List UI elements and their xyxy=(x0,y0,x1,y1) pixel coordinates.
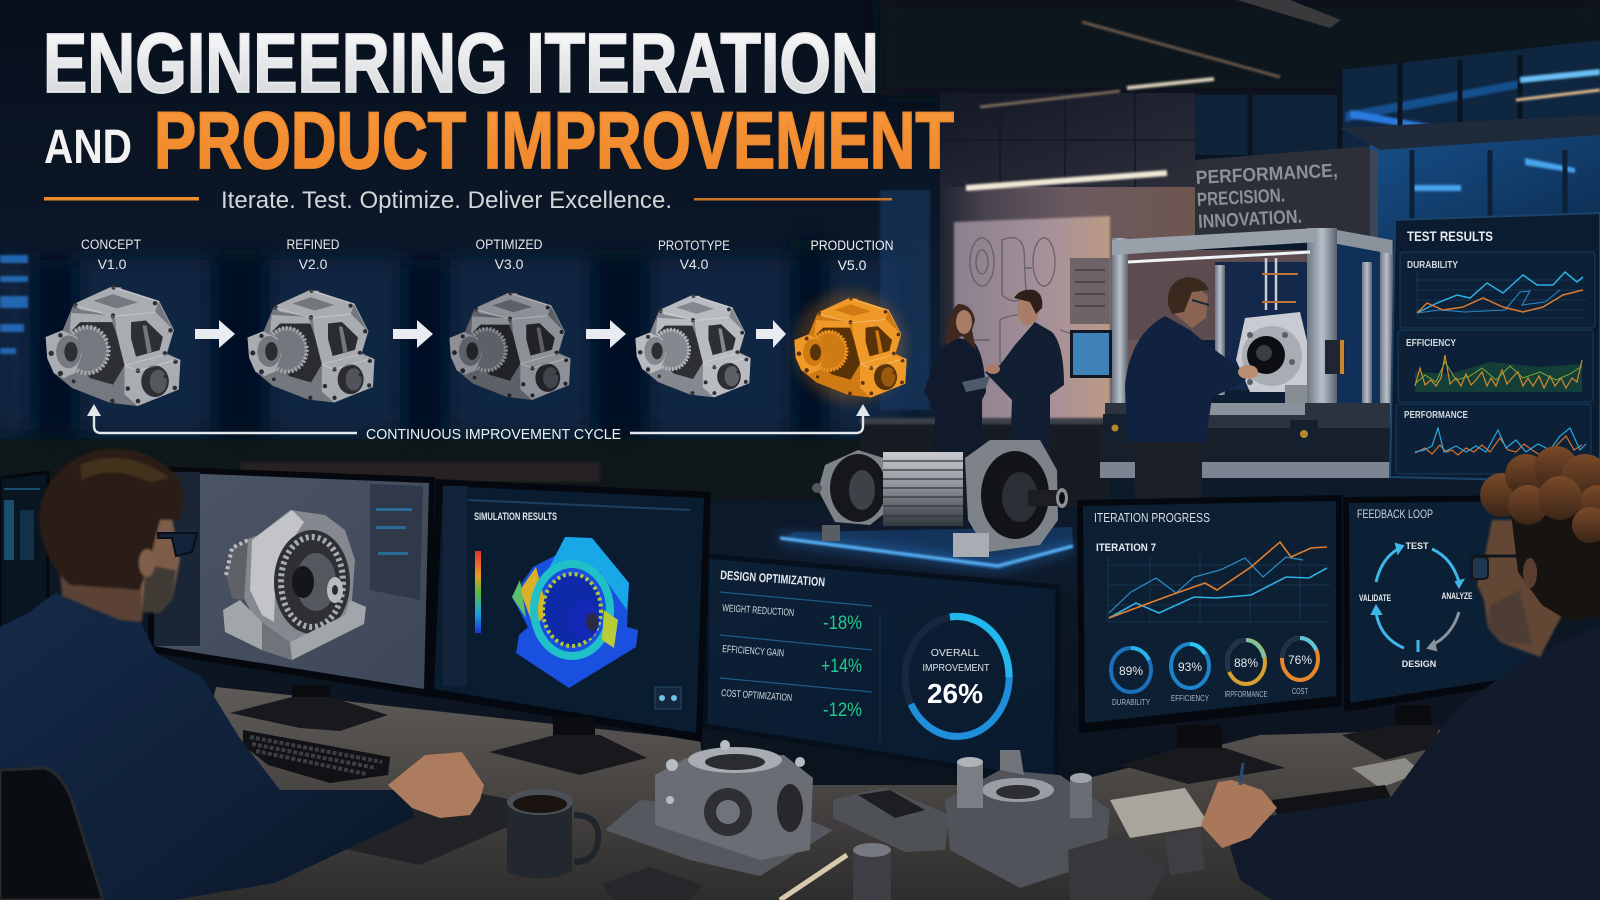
mouse pad xyxy=(326,783,551,865)
line chart: ITERATION 7 xyxy=(1096,542,1156,554)
rig frame xyxy=(1112,228,1393,448)
cycle diagram: DESIGN xyxy=(1402,659,1436,669)
head back xyxy=(1510,505,1600,622)
continuous improvement cycle xyxy=(87,404,870,443)
metric: efficiency gain xyxy=(722,644,862,677)
metric: weight reduction: WEIGHT REDUCTION xyxy=(722,603,794,619)
stage: optimized v3.0: V3.0 xyxy=(495,256,524,272)
test results panel xyxy=(1390,213,1600,482)
title word: and: AND xyxy=(44,121,132,174)
metric: weight reduction xyxy=(722,603,862,634)
face xyxy=(1477,520,1570,657)
metric: efficiency gain: EFFICIENCY GAIN xyxy=(722,644,784,659)
line chart xyxy=(1096,542,1330,622)
gauge: durability 89% xyxy=(1111,648,1151,707)
engineer at left xyxy=(0,449,484,900)
stage: production v5.0: PRODUCTION xyxy=(810,238,894,253)
stage: optimized v3.0: OPTIMIZED xyxy=(476,237,543,252)
wall sign xyxy=(1195,146,1370,240)
gauge: cost 76% xyxy=(1282,638,1318,696)
coffee mug xyxy=(507,789,598,878)
machined part 2 xyxy=(833,750,1205,900)
monitor stand xyxy=(489,717,647,775)
cycle diagram xyxy=(1359,541,1472,669)
glasses xyxy=(1470,556,1520,579)
gauge: performance 88%: IRPFORMANCE xyxy=(1224,689,1268,699)
overall improvement donut: IMPROVEMENT xyxy=(922,662,990,674)
upper wall xyxy=(940,93,1195,189)
panel heading: DESIGN OPTIMIZATION xyxy=(720,568,826,589)
engineer at test rig xyxy=(1125,277,1258,500)
durability chart xyxy=(1400,252,1595,328)
pen xyxy=(1240,763,1243,785)
performance chart xyxy=(1396,404,1591,474)
glasses xyxy=(158,533,197,556)
woman engineer xyxy=(924,304,990,452)
hand xyxy=(388,752,484,818)
overall improvement donut xyxy=(905,616,1009,737)
stage: production v5.0: V5.0 xyxy=(838,257,867,273)
title xyxy=(43,16,954,186)
panel heading: FEEDBACK LOOP xyxy=(1357,507,1433,521)
simulation housing heatmap xyxy=(512,537,638,688)
cycle diagram: ANALYZE xyxy=(1442,591,1472,601)
engineer at right xyxy=(1201,446,1600,900)
stage: refined v2.0 xyxy=(248,237,374,402)
back windows xyxy=(1195,40,1600,240)
monitor: left edge xyxy=(0,472,48,630)
shirt xyxy=(0,593,415,900)
test rig xyxy=(1100,228,1393,478)
version stages xyxy=(46,237,907,406)
stage: optimized v3.0 xyxy=(449,237,571,400)
keyboard right xyxy=(1272,785,1392,825)
gauge: efficiency 93%: 93% xyxy=(1178,660,1202,674)
monitor stand xyxy=(230,685,388,731)
small bracket xyxy=(602,867,703,900)
ear xyxy=(1523,558,1537,588)
tagline text: Iterate. Test. Optimize. Deliver Excellence. xyxy=(221,187,672,214)
stress colour scale xyxy=(475,551,481,633)
arrow 4 xyxy=(756,320,786,348)
stage: prototype v4.0: PROTOTYPE xyxy=(658,238,730,253)
glass platform xyxy=(700,520,1078,590)
shirt xyxy=(1230,625,1600,900)
keyboard left xyxy=(243,730,390,783)
curly hair xyxy=(1480,446,1600,543)
efficiency chart: EFFICIENCY xyxy=(1406,337,1456,349)
hand xyxy=(1201,780,1277,848)
gauge: durability 89%: DURABILITY xyxy=(1112,697,1150,707)
overall improvement donut: 26% xyxy=(927,678,983,709)
stage: refined v2.0: V2.0 xyxy=(299,256,328,272)
metric: efficiency gain: +14% xyxy=(821,656,862,677)
stage: concept v1.0: V1.0 xyxy=(98,256,127,272)
CAD base block xyxy=(223,600,366,660)
metric: cost optimization xyxy=(721,688,862,721)
stage: production v5.0 xyxy=(794,238,907,403)
cylinder part xyxy=(853,843,891,900)
CAD housing model xyxy=(223,510,366,660)
sim buttons xyxy=(655,687,681,709)
rig motor xyxy=(1236,312,1310,409)
two engineers talking xyxy=(924,290,1064,452)
desk xyxy=(170,687,1600,900)
stage: concept v1.0: CONCEPT xyxy=(81,237,141,252)
metric: cost optimization: -12% xyxy=(823,700,862,721)
monitor: simulation results xyxy=(428,479,711,775)
gauge: cost 76%: 76% xyxy=(1288,653,1312,667)
man engineer xyxy=(985,290,1064,452)
monitor: feedback loop xyxy=(1342,495,1540,760)
back benches xyxy=(0,418,1110,508)
panel heading: ITERATION PROGRESS xyxy=(1094,510,1210,525)
machined part 1 xyxy=(605,740,833,876)
head xyxy=(39,449,184,622)
monitor stand xyxy=(1120,725,1285,784)
cycle label: CONTINUOUS IMPROVEMENT CYCLE xyxy=(366,426,621,443)
stage: prototype v4.0: V4.0 xyxy=(680,256,709,272)
monitor: iteration progress xyxy=(1077,495,1342,784)
monitor stand xyxy=(1342,705,1440,760)
motor on display platform xyxy=(700,440,1078,590)
overall improvement donut: OVERALL xyxy=(931,647,979,659)
panel heading: TEST RESULTS xyxy=(1407,228,1493,244)
metric: weight reduction: -18% xyxy=(823,613,862,634)
stage: prototype v4.0 xyxy=(635,238,751,397)
tagline xyxy=(44,187,892,214)
chair xyxy=(0,768,103,900)
desk objects xyxy=(243,730,1422,900)
gauge: efficiency 93%: EFFICIENCY xyxy=(1171,693,1209,703)
ceiling lights xyxy=(966,22,1600,188)
stylus bar xyxy=(780,855,847,900)
durability chart: DURABILITY xyxy=(1407,259,1458,271)
simulation heading: SIMULATION RESULTS xyxy=(474,511,557,523)
cycle diagram: VALIDATE xyxy=(1359,593,1391,603)
wall sign: PRECISION. xyxy=(1196,185,1285,211)
cycle diagram: TEST xyxy=(1405,541,1429,551)
monitor: CAD model xyxy=(148,466,435,731)
gauge: performance 88% xyxy=(1224,640,1268,699)
gauge: efficiency 93% xyxy=(1171,644,1209,703)
stage: refined v2.0: REFINED xyxy=(286,237,340,252)
lower wall xyxy=(940,187,1195,427)
arrow 1 xyxy=(195,320,235,348)
wall drawings board xyxy=(954,216,1112,420)
gauge: durability 89%: 89% xyxy=(1119,664,1143,678)
stage: concept v1.0 xyxy=(46,237,180,406)
notepad right xyxy=(1352,758,1422,788)
stage arrows xyxy=(195,320,786,348)
performance chart: PERFORMANCE xyxy=(1404,409,1468,421)
metric: cost optimization: COST OPTIMIZATION xyxy=(721,688,792,704)
design optimization panel xyxy=(705,556,1058,782)
arrow 2 xyxy=(393,320,433,348)
wall sign: PERFORMANCE, xyxy=(1195,161,1338,189)
title line 1: ENGINEERING ITERATION xyxy=(43,16,879,110)
papers xyxy=(1110,788,1210,838)
wall sign: INNOVATION. xyxy=(1198,207,1303,233)
gauge: cost 76%: COST xyxy=(1292,686,1308,696)
title line 2: PRODUCT IMPROVEMENT xyxy=(154,96,954,186)
gauge: performance 88%: 88% xyxy=(1234,656,1258,670)
arrow 3 xyxy=(586,320,626,348)
efficiency chart xyxy=(1398,330,1593,402)
